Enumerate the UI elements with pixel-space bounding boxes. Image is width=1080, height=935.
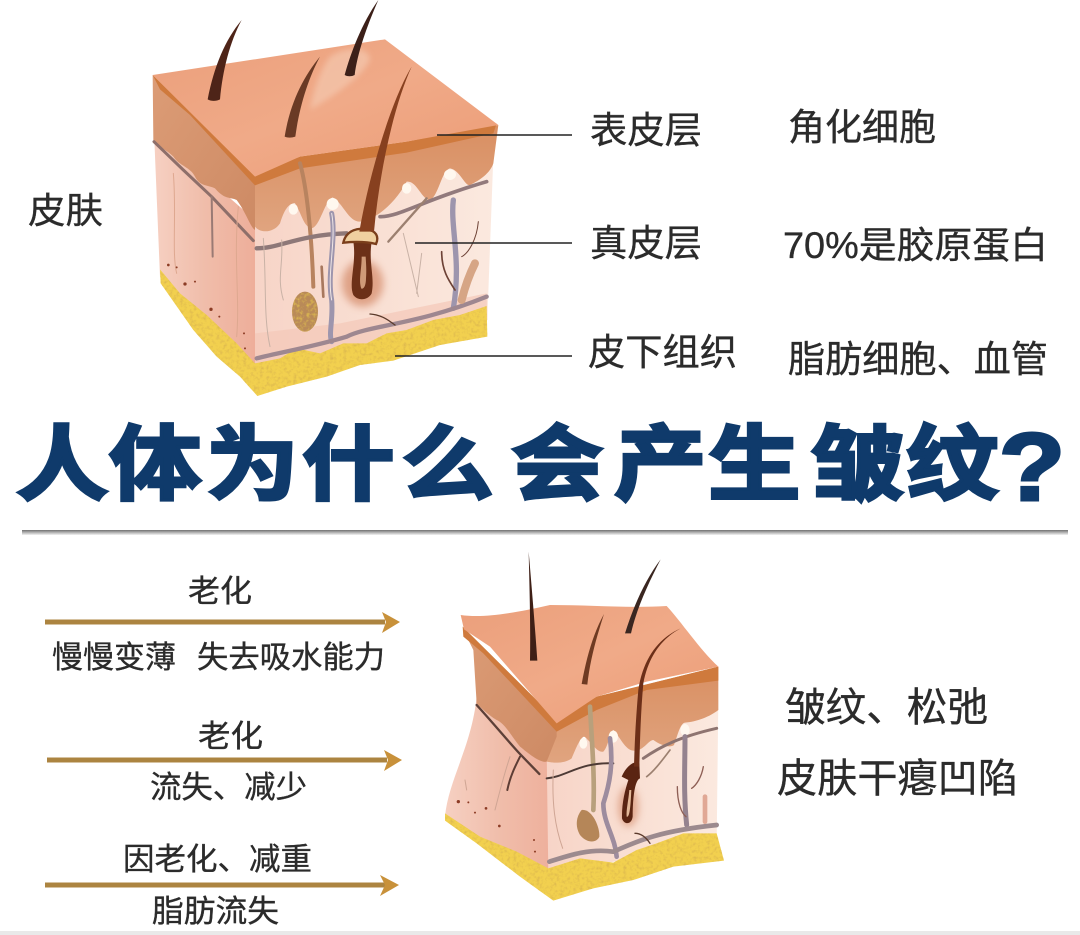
title: ? — [999, 413, 1065, 521]
effect: 脂肪流失 — [152, 894, 279, 929]
dermal papilla highlights — [289, 169, 456, 215]
title: 人体为什么会产生皱纹 — [16, 419, 999, 511]
arrow — [47, 750, 402, 771]
dermis left face — [154, 132, 255, 370]
label: subcutaneous tissue: 皮下组织 — [588, 332, 737, 373]
effect: 失去吸水能力 — [197, 640, 385, 675]
effect — [52, 640, 385, 675]
cause row 1 — [45, 574, 400, 675]
label: dermis: 真皮层 — [590, 223, 702, 264]
illustration: healthy skin cross-section — [153, 0, 498, 396]
description: epidermis: 角化细胞 — [788, 107, 936, 148]
description: dermis: 70%是胶原蛋白 — [783, 225, 1048, 266]
label: epidermis: 表皮层 — [590, 110, 702, 151]
dermis left face — [445, 697, 557, 872]
skin surface — [461, 605, 718, 723]
fat layer — [445, 813, 724, 901]
pink lower dermis — [255, 293, 487, 370]
dermis right face — [547, 700, 718, 873]
hairs — [208, 0, 412, 232]
heading: 老化 — [198, 719, 263, 754]
arrow — [45, 612, 400, 633]
bottom edge band — [0, 931, 1080, 935]
epidermis left — [463, 630, 557, 762]
fat specks — [167, 264, 246, 349]
orange stratum band — [463, 627, 718, 732]
epidermis right — [547, 667, 718, 763]
heading: 老化 — [188, 574, 252, 609]
leader lines for the upper diagram — [395, 135, 572, 356]
orange stratum band — [153, 75, 497, 185]
sweat gland — [577, 810, 599, 841]
cause row 2 — [47, 719, 402, 805]
subcutaneous fat layer — [160, 269, 487, 396]
sweat gland — [292, 292, 318, 332]
vessels and fibres — [154, 142, 487, 358]
fat specks — [457, 800, 536, 853]
effect: 慢慢变薄 — [52, 640, 176, 675]
cause row 3 — [45, 842, 399, 929]
light patch on surface — [310, 49, 370, 110]
divider — [22, 530, 1068, 535]
epidermis left face — [153, 75, 255, 230]
heading: 因老化、减重 — [123, 842, 312, 877]
hairs — [529, 552, 681, 767]
hair follicle — [342, 229, 383, 307]
result text: wrinkles and sagging: 皱纹、松弛 — [785, 686, 988, 730]
label: skin: 皮肤 — [28, 190, 103, 231]
effect: 流失、减少 — [150, 770, 307, 805]
vessels and fibres — [465, 705, 717, 862]
dermis right face — [255, 157, 493, 370]
skin surface — [153, 39, 498, 177]
illustration: aged wrinkled skin cross-section — [445, 552, 724, 901]
description: subcutaneous tissue: 脂肪细胞、血管 — [788, 339, 1048, 380]
epidermis front right — [255, 125, 498, 231]
arrow — [45, 875, 399, 896]
hair follicle — [618, 762, 640, 827]
result text: dry sunken skin: 皮肤干瘪凹陷 — [777, 757, 1018, 801]
dermal papilla highlights — [579, 724, 690, 749]
